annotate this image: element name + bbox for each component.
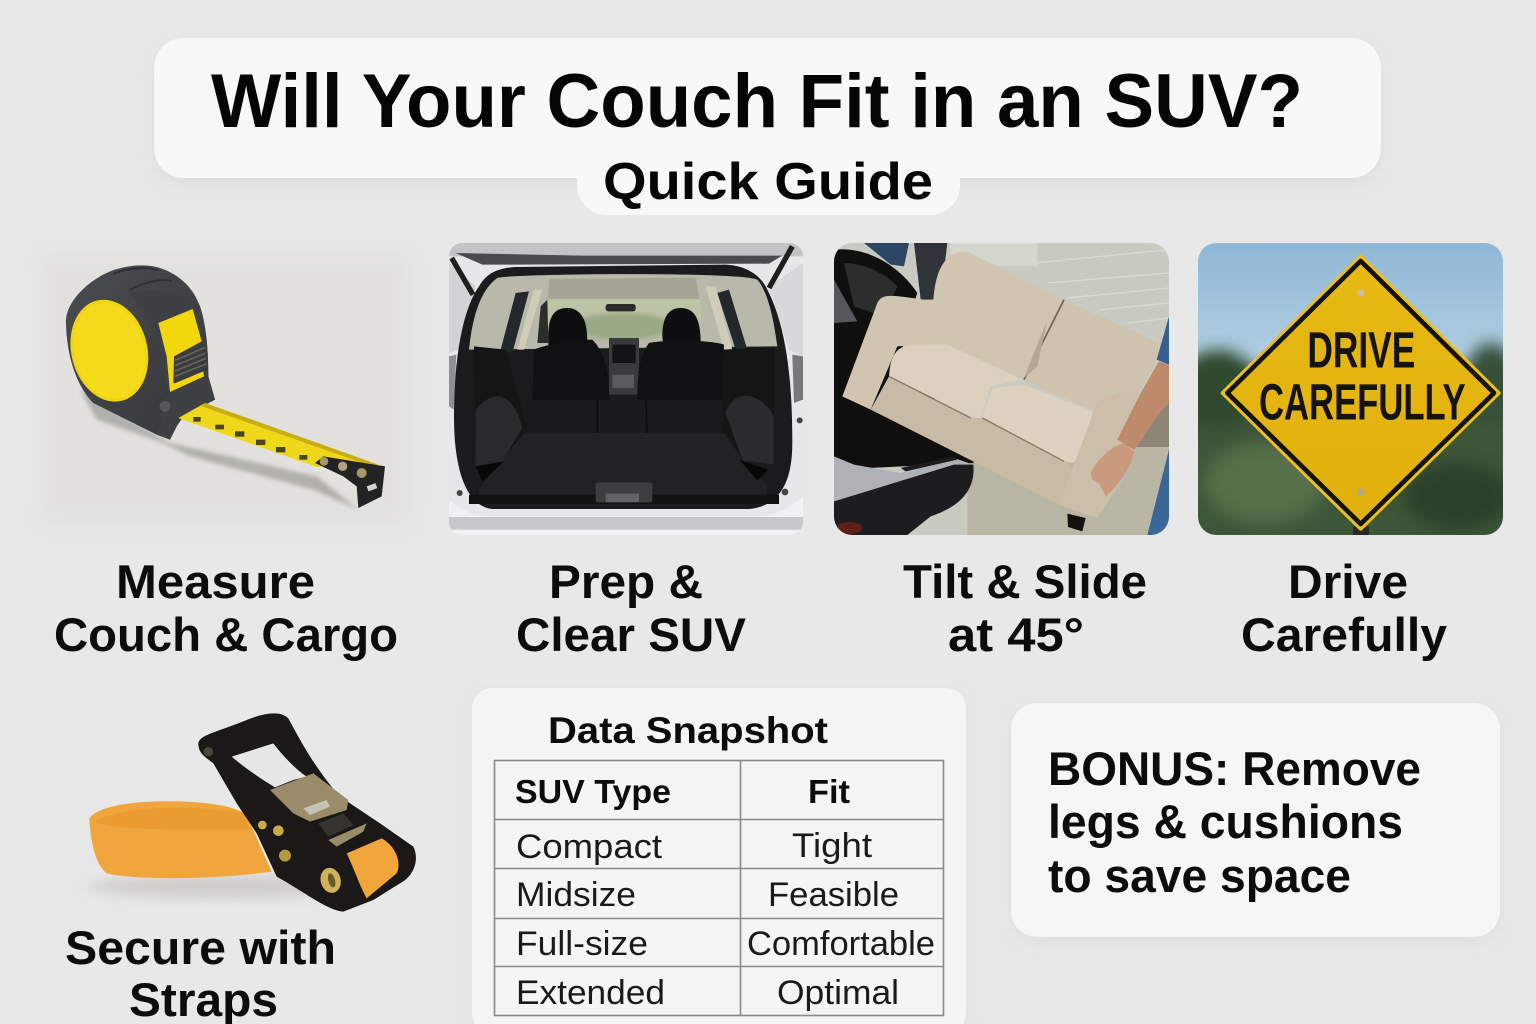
subtitle: Quick Guide	[603, 153, 933, 211]
label: measure: Couch & Cargo	[54, 608, 398, 661]
icon: tape measure photo	[40, 253, 412, 525]
label: prep: Clear SUV	[516, 608, 747, 661]
label: tilt: Tilt & Slide	[903, 555, 1147, 608]
title: Will Your Couch Fit in an SUV?	[211, 59, 1303, 144]
label: prep	[516, 555, 747, 661]
data table: Full-size	[516, 925, 648, 963]
rear seats	[548, 308, 588, 346]
ratchet mechanism	[270, 773, 348, 822]
data table: Feasible	[768, 876, 899, 914]
label: drive: Carefully	[1241, 608, 1447, 661]
data table	[494, 760, 944, 1016]
panel: bonus tip	[1011, 703, 1500, 942]
label: measure	[54, 555, 398, 661]
data table: Compact	[516, 828, 663, 866]
data table: Comfortable	[747, 925, 935, 963]
panel: bonus tip: to save space	[1048, 849, 1351, 902]
icon: ratchet strap	[87, 713, 416, 912]
heading: data snapshot: Data Snapshot	[548, 710, 828, 751]
panel: bonus tip: legs & cushions	[1048, 795, 1403, 848]
label: secure with straps	[65, 921, 336, 1024]
panel: data snapshot	[472, 688, 966, 1024]
label: tilt	[903, 555, 1147, 661]
label: measure: Measure	[116, 555, 315, 608]
roller	[347, 838, 399, 898]
data table: Tight	[792, 827, 873, 865]
label: secure with straps: Secure with	[65, 921, 336, 974]
car door and cargo	[834, 249, 974, 470]
strap loop	[262, 776, 293, 793]
sign: DRIVE	[1307, 321, 1415, 378]
label: prep: Prep &	[549, 555, 703, 608]
data table: SUV Type	[515, 773, 671, 810]
label: drive: Drive	[1288, 555, 1408, 608]
tape blade	[178, 403, 378, 467]
rivets	[258, 821, 267, 829]
data table: Midsize	[516, 876, 636, 914]
arm and clothing	[1157, 316, 1169, 365]
title banner	[154, 38, 1381, 215]
label: drive	[1241, 555, 1447, 661]
window view	[547, 299, 701, 337]
photo: couch tilted into SUV	[834, 243, 1169, 535]
ratchet handle	[198, 713, 416, 912]
data table: Optimal	[777, 974, 899, 1012]
data table: Fit	[808, 773, 850, 810]
photo: drive carefully road sign	[1198, 243, 1503, 535]
photo: open SUV cargo area	[449, 243, 803, 535]
panel: bonus tip: BONUS: Remove	[1048, 742, 1421, 795]
label: tilt: at 45°	[948, 608, 1084, 661]
sign	[1223, 256, 1499, 529]
couch	[842, 252, 1159, 531]
bumper	[449, 496, 803, 535]
data table: Extended	[516, 974, 665, 1012]
